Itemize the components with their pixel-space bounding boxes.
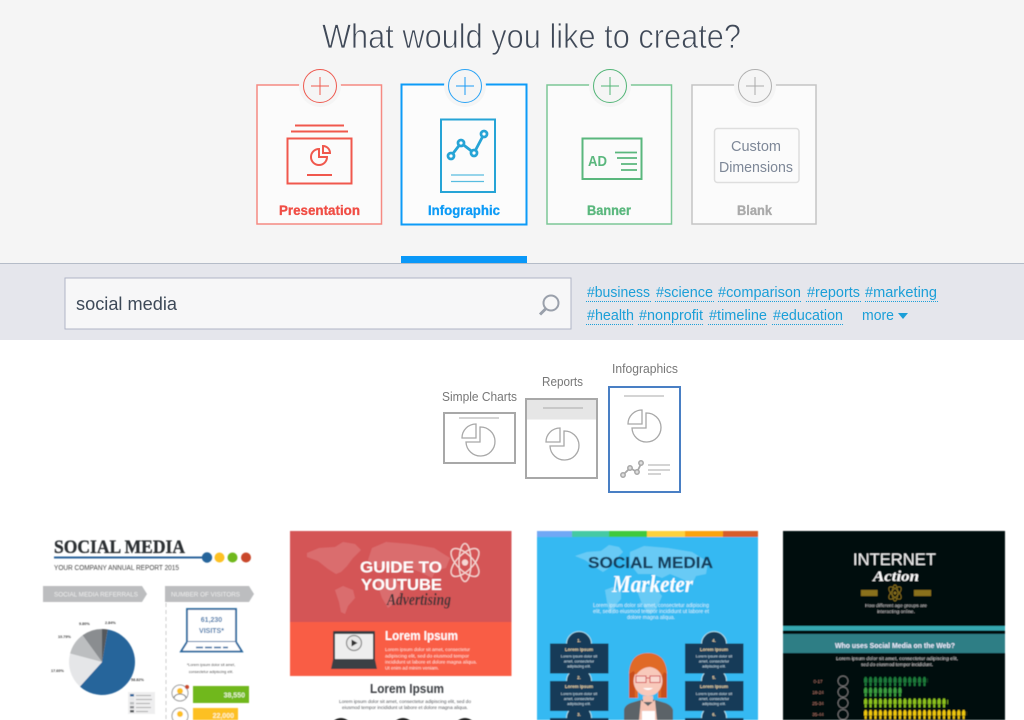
- pie chart: 2.84%: [105, 621, 116, 625]
- thumbnail: social media marketer: 3.: [577, 712, 581, 717]
- thumbnail: social media marketer: 5.: [712, 675, 716, 680]
- thumbnail: guide to youtube advertising: Lorem Ipsum: [385, 628, 458, 643]
- thumbnail: social media marketer: Lorem ipsum dolor sit: [561, 654, 598, 658]
- thumbnail: guide to youtube advertising: Lorem ipsum dolor sit amet, consectetur adipiscing elit, sed do: [339, 699, 472, 704]
- thumbnail: guide to youtube advertising: GUIDE TO: [360, 560, 442, 576]
- thumbnail: social media annual report: *Lorem ipsum dolor sit amet,: [187, 663, 235, 667]
- thumbnail: guide to youtube advertising: incididunt ut labore et dolore magna aliqua.: [385, 660, 477, 664]
- laptop with play button: [331, 631, 377, 669]
- age group chart: [812, 676, 967, 720]
- visitor bars: 38,550: [224, 692, 245, 700]
- thumbnail: social media marketer: adipiscing elit.: [567, 664, 591, 668]
- thumbnail: social media marketer: amet, consectetur: [699, 697, 730, 701]
- label: presentation: Presentation: [279, 202, 360, 218]
- thumbnail: social media marketer: SOCIAL MEDIA: [588, 555, 713, 572]
- world map: [575, 545, 708, 614]
- selector: reports: [526, 375, 597, 478]
- world map: [307, 542, 450, 614]
- hashtag links: #timeline: [709, 308, 767, 324]
- selector: infographics (active): [609, 362, 680, 492]
- thumbnail: guide to youtube advertising: Lorem ipsum dolor sit amet, consectetur: [385, 647, 471, 652]
- thumbnail: social media marketer: Marketer: [611, 572, 694, 598]
- thumbnail: internet action: Lorem ipsum dolor sit amet, consectetur adipiscing elit,: [836, 656, 958, 662]
- icon: banner ad: [582, 138, 642, 179]
- thumbnail: social media marketer: 4.: [712, 638, 716, 643]
- icon: custom dimensions: [714, 128, 799, 182]
- active tab indicator: [401, 256, 527, 263]
- thumbnail: internet action: [783, 531, 1005, 720]
- label: banner: Banner: [587, 202, 632, 218]
- age group chart: 0-17: [813, 679, 823, 684]
- thumbnail: internet action: interacting online.: [877, 609, 915, 615]
- heading: What would you like to create?: [322, 18, 741, 56]
- selector: simple charts: Simple Charts: [442, 390, 517, 404]
- thumbnail: social media annual report: NUMBER OF VISITORS: [171, 592, 241, 598]
- icon: atom: [447, 544, 483, 582]
- thumbnail: social media annual report: [43, 537, 254, 720]
- thumbnail: social media marketer: [537, 531, 758, 720]
- pie chart: 9.80%: [79, 622, 90, 626]
- hashtag links: #business: [587, 285, 650, 301]
- icon: presentation screen: [288, 126, 352, 184]
- visitor bars: 22,000: [213, 713, 234, 720]
- thumbnail: guide to youtube advertising: Lorem Ipsum: [370, 681, 444, 696]
- selector: reports: Reports: [542, 375, 583, 389]
- icon: infographic document: [441, 120, 495, 192]
- hashtag links: #nonprofit: [639, 308, 703, 324]
- thumbnail: internet action: sed do eiusmod tempor incididunt.: [861, 662, 933, 668]
- thumbnail: social media marketer: Lorem Ipsum: [700, 647, 728, 652]
- numbered boxes: [566, 632, 726, 720]
- laptop: visits: [181, 609, 242, 652]
- visitor bars: [172, 685, 249, 720]
- pie chart: 58.82%: [131, 678, 145, 682]
- selector: infographics (active): Infographics: [612, 362, 678, 376]
- pie chart: 17.60%: [51, 669, 65, 673]
- thumbnail: social media annual report: SOCIAL MEDIA: [54, 537, 185, 558]
- thumbnail: internet action: How different age groups are: [865, 603, 927, 609]
- thumbnail: social media marketer: Lorem Ipsum: [565, 647, 593, 652]
- thumbnail: guide to youtube advertising: YOUTUBE: [361, 577, 442, 594]
- thumbnail: guide to youtube advertising: Ut enim ad minim veniam.: [385, 666, 439, 670]
- thumbnail: social media marketer: Lorem ipsum dolor sit amet, consectetur adipiscing: [593, 603, 709, 609]
- thumbnail: guide to youtube advertising: Advertising: [386, 590, 451, 609]
- search box: [65, 278, 571, 329]
- thumbnail: internet action: Who uses Social Media on the Web?: [835, 641, 955, 650]
- plus button: infographic: [444, 65, 486, 107]
- thumbnail: social media marketer: amet, consectetur: [564, 660, 595, 664]
- hashtag links: [586, 285, 938, 324]
- plus button: banner: [589, 65, 631, 107]
- pie chart: 10.79%: [58, 635, 72, 639]
- card: presentation: [257, 65, 382, 224]
- hashtag links: #health: [587, 308, 634, 324]
- thumbnail: social media marketer: adipiscing elit.: [702, 702, 726, 706]
- hashtag links: #marketing: [865, 285, 937, 301]
- thumbnail: social media marketer: Lorem ipsum dolor sit: [561, 692, 598, 696]
- thumbnail: social media marketer: 6.: [712, 712, 716, 717]
- person illustration: [624, 653, 673, 720]
- icon: atom: [887, 585, 903, 601]
- thumbnail: internet action: Action: [872, 569, 919, 585]
- thumbnail: social media annual report: YOUR COMPANY ANNUAL REPORT 2015: [54, 565, 179, 572]
- hashtag links: #reports: [807, 285, 860, 301]
- laptop: visits: VISITS*: [199, 628, 224, 635]
- thumbnail: social media annual report: consectetur adipiscing elit.: [189, 670, 233, 674]
- icon: banner ad: AD: [588, 153, 607, 170]
- label: infographic: Infographic: [428, 202, 500, 218]
- plus button: presentation: [299, 65, 341, 107]
- pie legend: [128, 692, 155, 714]
- card: infographic: [402, 65, 526, 224]
- search query: social media: [76, 293, 178, 314]
- thumbnail: guide to youtube advertising: eiusmod tempor incididunt ut labore et dolore magna aliqua.: [342, 705, 468, 710]
- icon: custom dimensions: Dimensions: [719, 159, 793, 176]
- thumbnail: social media marketer: 1.: [577, 638, 581, 643]
- card: blank: [692, 65, 816, 224]
- thumbnail: social media marketer: adipiscing elit.: [567, 702, 591, 706]
- colour stripe: [537, 531, 758, 537]
- thumbnail: social media marketer: Lorem ipsum dolor sit: [696, 692, 733, 696]
- thumbnail: guide to youtube advertising: [290, 531, 512, 720]
- thumbnail: social media marketer: adipiscing elit.: [702, 664, 726, 668]
- pie chart: [51, 621, 145, 695]
- thumbnail: social media marketer: Lorem ipsum dolor sit: [696, 654, 733, 658]
- icon: custom dimensions: Custom: [731, 138, 781, 155]
- thumbnail: social media marketer: amet, consectetur: [564, 697, 595, 701]
- thumbnail: social media annual report: SOCIAL MEDIA REFERRALS: [54, 592, 139, 598]
- card: banner: [547, 65, 672, 224]
- thumbnail: guide to youtube advertising: adipiscing elit, sed do eiusmod tempor: [385, 654, 470, 658]
- label: blank: Blank: [737, 202, 772, 218]
- icon: magnifier: [540, 296, 558, 314]
- age group chart: 25-34: [812, 701, 824, 706]
- hashtag links: more: [862, 308, 894, 324]
- hashtag links: #science: [656, 285, 713, 301]
- thumbnail: social media marketer: Lorem Ipsum: [700, 684, 728, 689]
- laptop: visits: 61,230: [201, 617, 222, 624]
- age group chart: 35-44: [812, 712, 824, 717]
- divider: [0, 263, 1024, 264]
- thumbnail: social media marketer: elit, sed do eiusmod tempor incididunt ut labore et: [593, 609, 710, 615]
- hashtag links: #education: [773, 308, 843, 324]
- search band background: [0, 264, 1024, 340]
- thumbnail: social media marketer: dolore magna aliqua.: [627, 615, 675, 621]
- header background: [0, 0, 1024, 264]
- plus button: blank: [734, 65, 776, 107]
- age group chart: 18-24: [812, 690, 824, 695]
- selector: simple charts: [442, 390, 517, 463]
- thumbnail: social media marketer: amet, consectetur: [699, 660, 730, 664]
- thumbnail: internet action: INTERNET: [853, 550, 936, 569]
- hashtag links: #comparison: [718, 285, 801, 301]
- thumbnail: social media marketer: 2.: [577, 675, 581, 680]
- thumbnail: social media marketer: Lorem Ipsum: [565, 684, 593, 689]
